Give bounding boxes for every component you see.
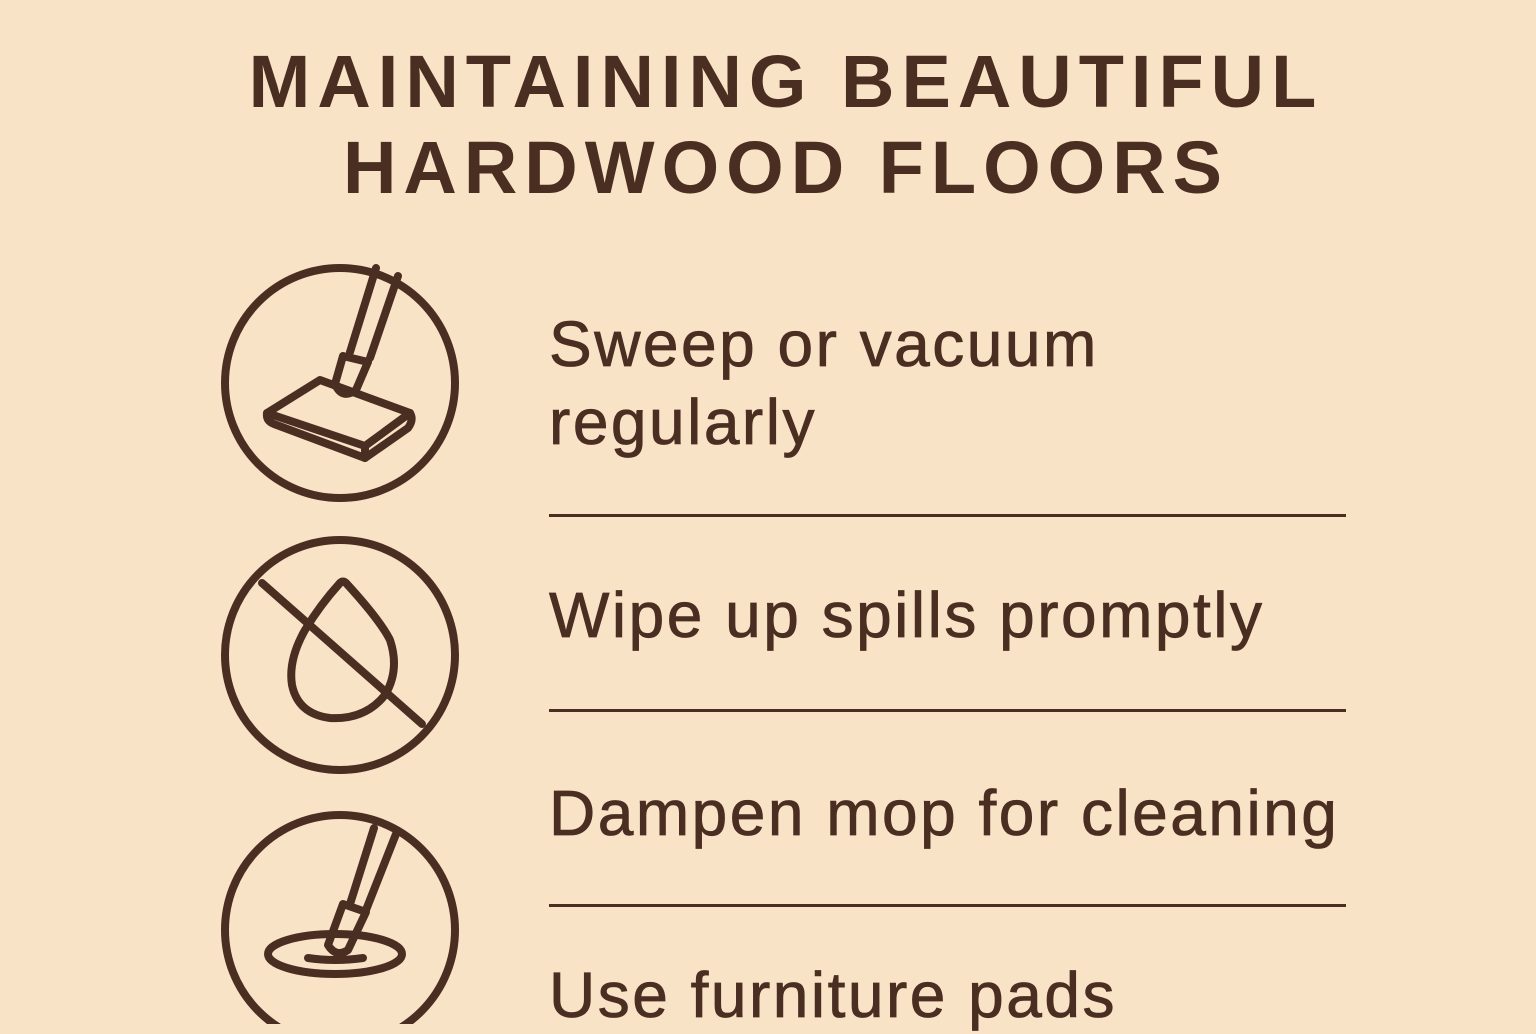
item: sweep bbox=[549, 308, 1099, 458]
item: pads: Use furniture pads bbox=[549, 959, 1117, 1031]
item: mop: Dampen mop for cleaning bbox=[549, 777, 1339, 849]
icon: damp mop bbox=[225, 815, 455, 1034]
icon: no spill bbox=[225, 540, 455, 770]
item: sweep: regularly bbox=[549, 386, 817, 458]
icon: sweep bbox=[225, 268, 455, 498]
item: sweep: Sweep or vacuum bbox=[549, 308, 1099, 380]
title bbox=[249, 40, 1323, 209]
title: HARDWOOD FLOORS bbox=[343, 126, 1229, 209]
title: MAINTAINING BEAUTIFUL bbox=[249, 40, 1323, 123]
item: spills: Wipe up spills promptly bbox=[549, 579, 1264, 651]
